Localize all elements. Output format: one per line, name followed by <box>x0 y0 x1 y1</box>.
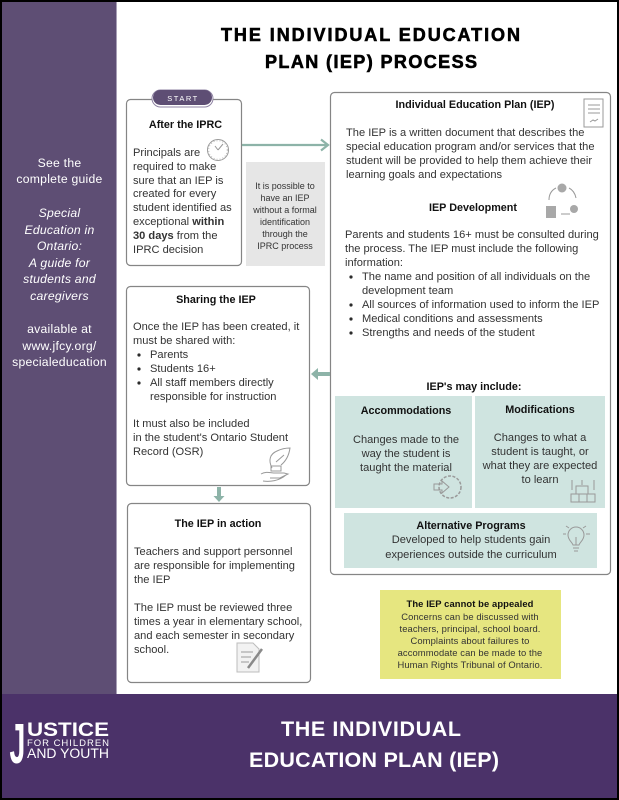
panel: individual education plan <box>330 92 610 574</box>
icon: notepad and pen <box>237 643 262 672</box>
callout: cannot be appealed: Complaints about failures to <box>410 635 530 646</box>
callout: formal identification: without a formal <box>252 205 317 215</box>
logo: USTICE <box>27 719 109 741</box>
body text: IPRC decision <box>133 244 203 256</box>
bullet list: development team <box>362 285 453 297</box>
body text: Record (OSR) <box>133 446 203 458</box>
development text: Parents and students 16+ must be consulted during <box>345 229 599 241</box>
panel: after the IPRC <box>126 90 242 266</box>
callout: cannot be appealed: Human Rights Tribunal of Ontario. <box>397 659 543 670</box>
callout: formal identification: have an IEP <box>260 193 310 203</box>
card: modifications <box>475 396 605 508</box>
side note text: available at <box>27 322 92 336</box>
card: modifications: what they are expected <box>482 460 597 472</box>
callout: formal identification <box>246 162 325 266</box>
body text: student will be provided to help them achieve their <box>346 155 592 167</box>
footer title: EDUCATION PLAN (IEP) <box>249 748 499 772</box>
body text: Students 16+ <box>150 363 216 375</box>
side note text: See the <box>38 156 81 170</box>
card: accommodations: Changes made to the <box>353 434 459 446</box>
body text: sure that an IEP is <box>133 175 224 187</box>
card: alternative programs: Alternative Programs <box>416 520 526 532</box>
side note text: Ontario: <box>37 239 82 253</box>
card: alternative programs <box>344 513 597 568</box>
side note text: Special <box>39 206 80 220</box>
title: PLAN (IEP) PROCESS <box>265 52 477 72</box>
start badge <box>152 90 213 107</box>
callout: formal identification: It is possible to <box>255 181 315 191</box>
body text <box>133 321 299 458</box>
body text: Principals are <box>133 147 200 159</box>
heading: may include: IEP's may include: <box>427 381 521 393</box>
title <box>221 25 520 72</box>
body text: special education program and/or services that the <box>346 141 595 153</box>
logo <box>10 711 109 776</box>
body text <box>133 147 232 256</box>
callout: cannot be appealed <box>380 590 561 679</box>
logo: AND YOUTH <box>27 746 109 761</box>
body text: are responsible for implementing <box>134 560 295 572</box>
icon: hand with leaf <box>261 448 290 481</box>
body text <box>346 127 595 181</box>
body text: school. <box>134 644 169 656</box>
bullet list: All sources of information used to inform the IEP <box>362 299 599 311</box>
bullet list: The name and position of all individuals on the <box>362 271 590 283</box>
bullet list <box>349 271 599 339</box>
footer band <box>0 694 619 800</box>
callout: cannot be appealed: accommodate can be made to the <box>398 647 542 658</box>
body text: must be shared with: <box>133 335 235 347</box>
body text: Teachers and support personnel <box>134 546 292 558</box>
body text: in the student's Ontario Student <box>133 432 288 444</box>
card: modifications: student is taught, or <box>491 446 589 458</box>
side note text: students and <box>23 272 97 286</box>
callout: cannot be appealed: Concerns can be discussed with <box>401 611 539 622</box>
body text: required to make <box>133 161 216 173</box>
icon: development cycle <box>546 184 578 218</box>
bullet list: Medical conditions and assessments <box>362 313 543 325</box>
body text: created for every <box>133 188 217 200</box>
icon: document <box>584 99 603 127</box>
logo: FOR CHILDREN <box>27 738 109 749</box>
body text: The IEP must be reviewed three <box>134 602 292 614</box>
icon: clock <box>208 140 228 160</box>
callout: cannot be appealed: The IEP cannot be appealed <box>407 598 534 609</box>
icon: blocks <box>571 480 595 502</box>
body text: 30 days from the <box>133 230 218 242</box>
development text: the process. The IEP must include the following <box>345 243 578 255</box>
card: accommodations: taught the material <box>360 462 452 474</box>
heading: After the IPRC <box>149 119 222 131</box>
card: accommodations: Accommodations <box>361 405 451 417</box>
side note text: www.jfcy.org/ <box>21 339 97 353</box>
callout: formal identification: identification <box>260 217 310 227</box>
card: accommodations: way the student is <box>361 448 451 460</box>
panel: the IEP in action <box>128 504 310 682</box>
side note text: caregivers <box>30 289 89 303</box>
heading: The IEP in action <box>175 518 261 530</box>
title: THE INDIVIDUAL EDUCATION <box>221 25 520 45</box>
body text: The IEP is a written document that describes the <box>346 127 584 139</box>
body text: times a year in elementary school, <box>134 616 302 628</box>
card: alternative programs: Developed to help students gain <box>392 534 550 546</box>
side note text <box>12 156 107 369</box>
body text: the IEP <box>134 574 170 586</box>
card: modifications: to learn <box>521 474 559 486</box>
development text: information: <box>345 257 403 269</box>
callout: cannot be appealed: teachers, principal, school board. <box>400 623 540 634</box>
callout: formal identification: through the <box>262 229 308 239</box>
arrow to sharing panel <box>311 368 330 380</box>
callout: formal identification: IPRC process <box>257 241 313 251</box>
body text: Once the IEP has been created, it <box>133 321 299 333</box>
logo: J <box>10 711 25 776</box>
development text <box>345 229 599 269</box>
body text: All staff members directly <box>150 377 274 389</box>
icon: gear arrow <box>434 476 461 498</box>
body text: and each semester in secondary <box>134 630 295 642</box>
card: modifications: Changes to what a <box>494 432 587 444</box>
card: modifications: Modifications <box>505 404 575 416</box>
body text: Parents <box>150 349 189 361</box>
arrow to IEP in action <box>214 487 224 502</box>
card: accommodations <box>335 396 472 508</box>
heading: Sharing the IEP <box>176 294 256 306</box>
body text: learning goals and expectations <box>346 169 502 181</box>
bullet list: Strengths and needs of the student <box>362 327 535 339</box>
body text <box>134 546 302 656</box>
card: alternative programs: experiences outside the curriculum <box>385 549 557 561</box>
body text: exceptional within <box>133 216 224 228</box>
panel: sharing the IEP <box>126 286 310 486</box>
heading: Individual Education Plan (IEP) <box>396 99 555 111</box>
body text: It must also be included <box>133 418 250 430</box>
footer title: THE INDIVIDUAL <box>281 717 461 741</box>
body text: responsible for instruction <box>150 391 276 403</box>
heading: IEP development: IEP Development <box>429 202 517 214</box>
footer title <box>249 717 499 772</box>
side note text: A guide for <box>28 256 91 270</box>
side note text: specialeducation <box>12 355 107 369</box>
side note text: complete guide <box>16 172 103 186</box>
body text: student identified as <box>133 202 232 214</box>
start badge: START <box>167 94 199 103</box>
arrow to IEP panel <box>242 140 328 150</box>
side note text: Education in <box>24 223 95 237</box>
icon: light bulb <box>563 526 590 551</box>
